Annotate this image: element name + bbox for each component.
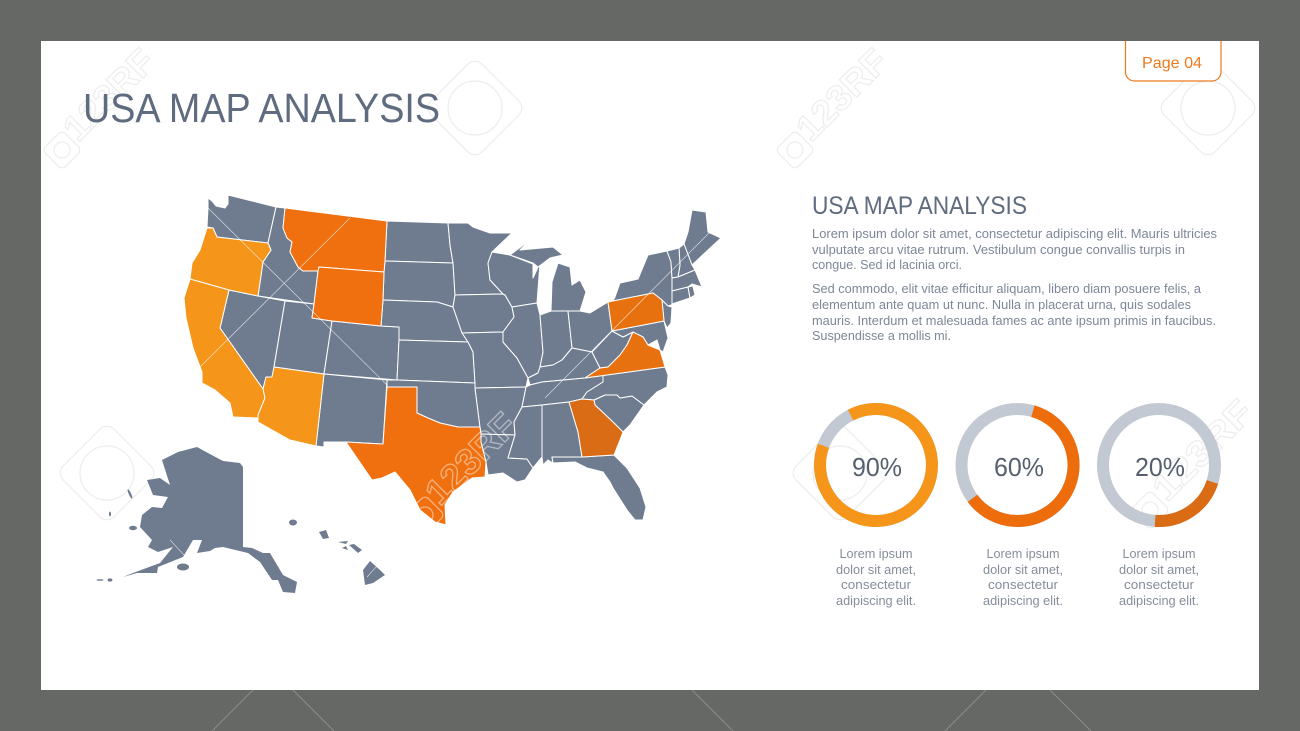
USA map xyxy=(96,195,721,593)
caption: 60%: adipiscing elit. xyxy=(983,594,1063,608)
donut: 60% xyxy=(962,409,1074,521)
Alaska xyxy=(96,447,297,593)
text: 123RF xyxy=(55,40,163,149)
caption: 60%: dolor sit amet, xyxy=(983,563,1063,577)
title: USA MAP ANALYSIS xyxy=(83,85,440,131)
donut: 60%: 60% xyxy=(994,452,1044,482)
caption: 20%: dolor sit amet, xyxy=(1119,563,1199,577)
caption: 20%: adipiscing elit. xyxy=(1119,594,1199,608)
USA map: 123RF xyxy=(417,404,525,513)
caption: 20%: consectetur xyxy=(1124,578,1194,592)
caption: 90%: dolor sit amet, xyxy=(836,563,916,577)
caption: 90%: consectetur xyxy=(841,578,911,592)
section heading: USA MAP ANALYSIS xyxy=(812,192,1027,220)
page tab: Page 04 xyxy=(1142,55,1202,72)
paragraph 2: Suspendisse a mollis mi. xyxy=(812,329,951,343)
paragraph 1: congue. Sed id lacinia orci. xyxy=(812,258,962,272)
state group: dark orange states xyxy=(585,293,665,378)
donut: 20%: 20% xyxy=(1135,452,1185,482)
caption: 60%: consectetur xyxy=(988,578,1058,592)
caption: 60% xyxy=(983,547,1063,608)
paragraph 2: elementum ante quam ut nunc. Nulla in placerat urna, quis sodales xyxy=(812,298,1191,312)
paragraph 1 xyxy=(812,227,1217,272)
state group: gray states xyxy=(207,195,721,520)
donut: 20% xyxy=(1103,409,1215,521)
Hawaii xyxy=(289,520,385,585)
paragraph 2 xyxy=(812,282,1216,343)
caption: 20%: Lorem ipsum xyxy=(1122,547,1196,561)
state: Georgia xyxy=(569,399,623,457)
donut: 90%: 90% xyxy=(852,452,902,482)
page tab xyxy=(1126,41,1221,81)
text: 123RF xyxy=(1144,391,1261,509)
caption: 90%: Lorem ipsum xyxy=(840,547,912,561)
state group: light orange states xyxy=(184,228,324,446)
caption: 90%: adipiscing elit. xyxy=(836,594,916,608)
state group: orange states xyxy=(283,208,486,525)
paragraph 1: Lorem ipsum dolor sit amet, consectetur adipiscing elit. Mauris ultricies xyxy=(812,227,1217,241)
caption: 20% xyxy=(1119,547,1199,608)
paragraph 2: mauris. Interdum et malesuada fames ac ante ipsum primis in faucibus. xyxy=(812,314,1216,328)
caption: 60%: Lorem ipsum xyxy=(986,547,1060,561)
paragraph 1: vulputate arcu vitae rutrum. Vestibulum congue convallis turpis in xyxy=(812,243,1185,257)
paragraph 2: Sed commodo, elit vitae efficitur aliquam, libero diam posuere felis, a xyxy=(812,282,1201,296)
donut: 90% xyxy=(820,409,932,521)
text: 123RF xyxy=(788,40,896,149)
caption: 90% xyxy=(836,547,916,608)
